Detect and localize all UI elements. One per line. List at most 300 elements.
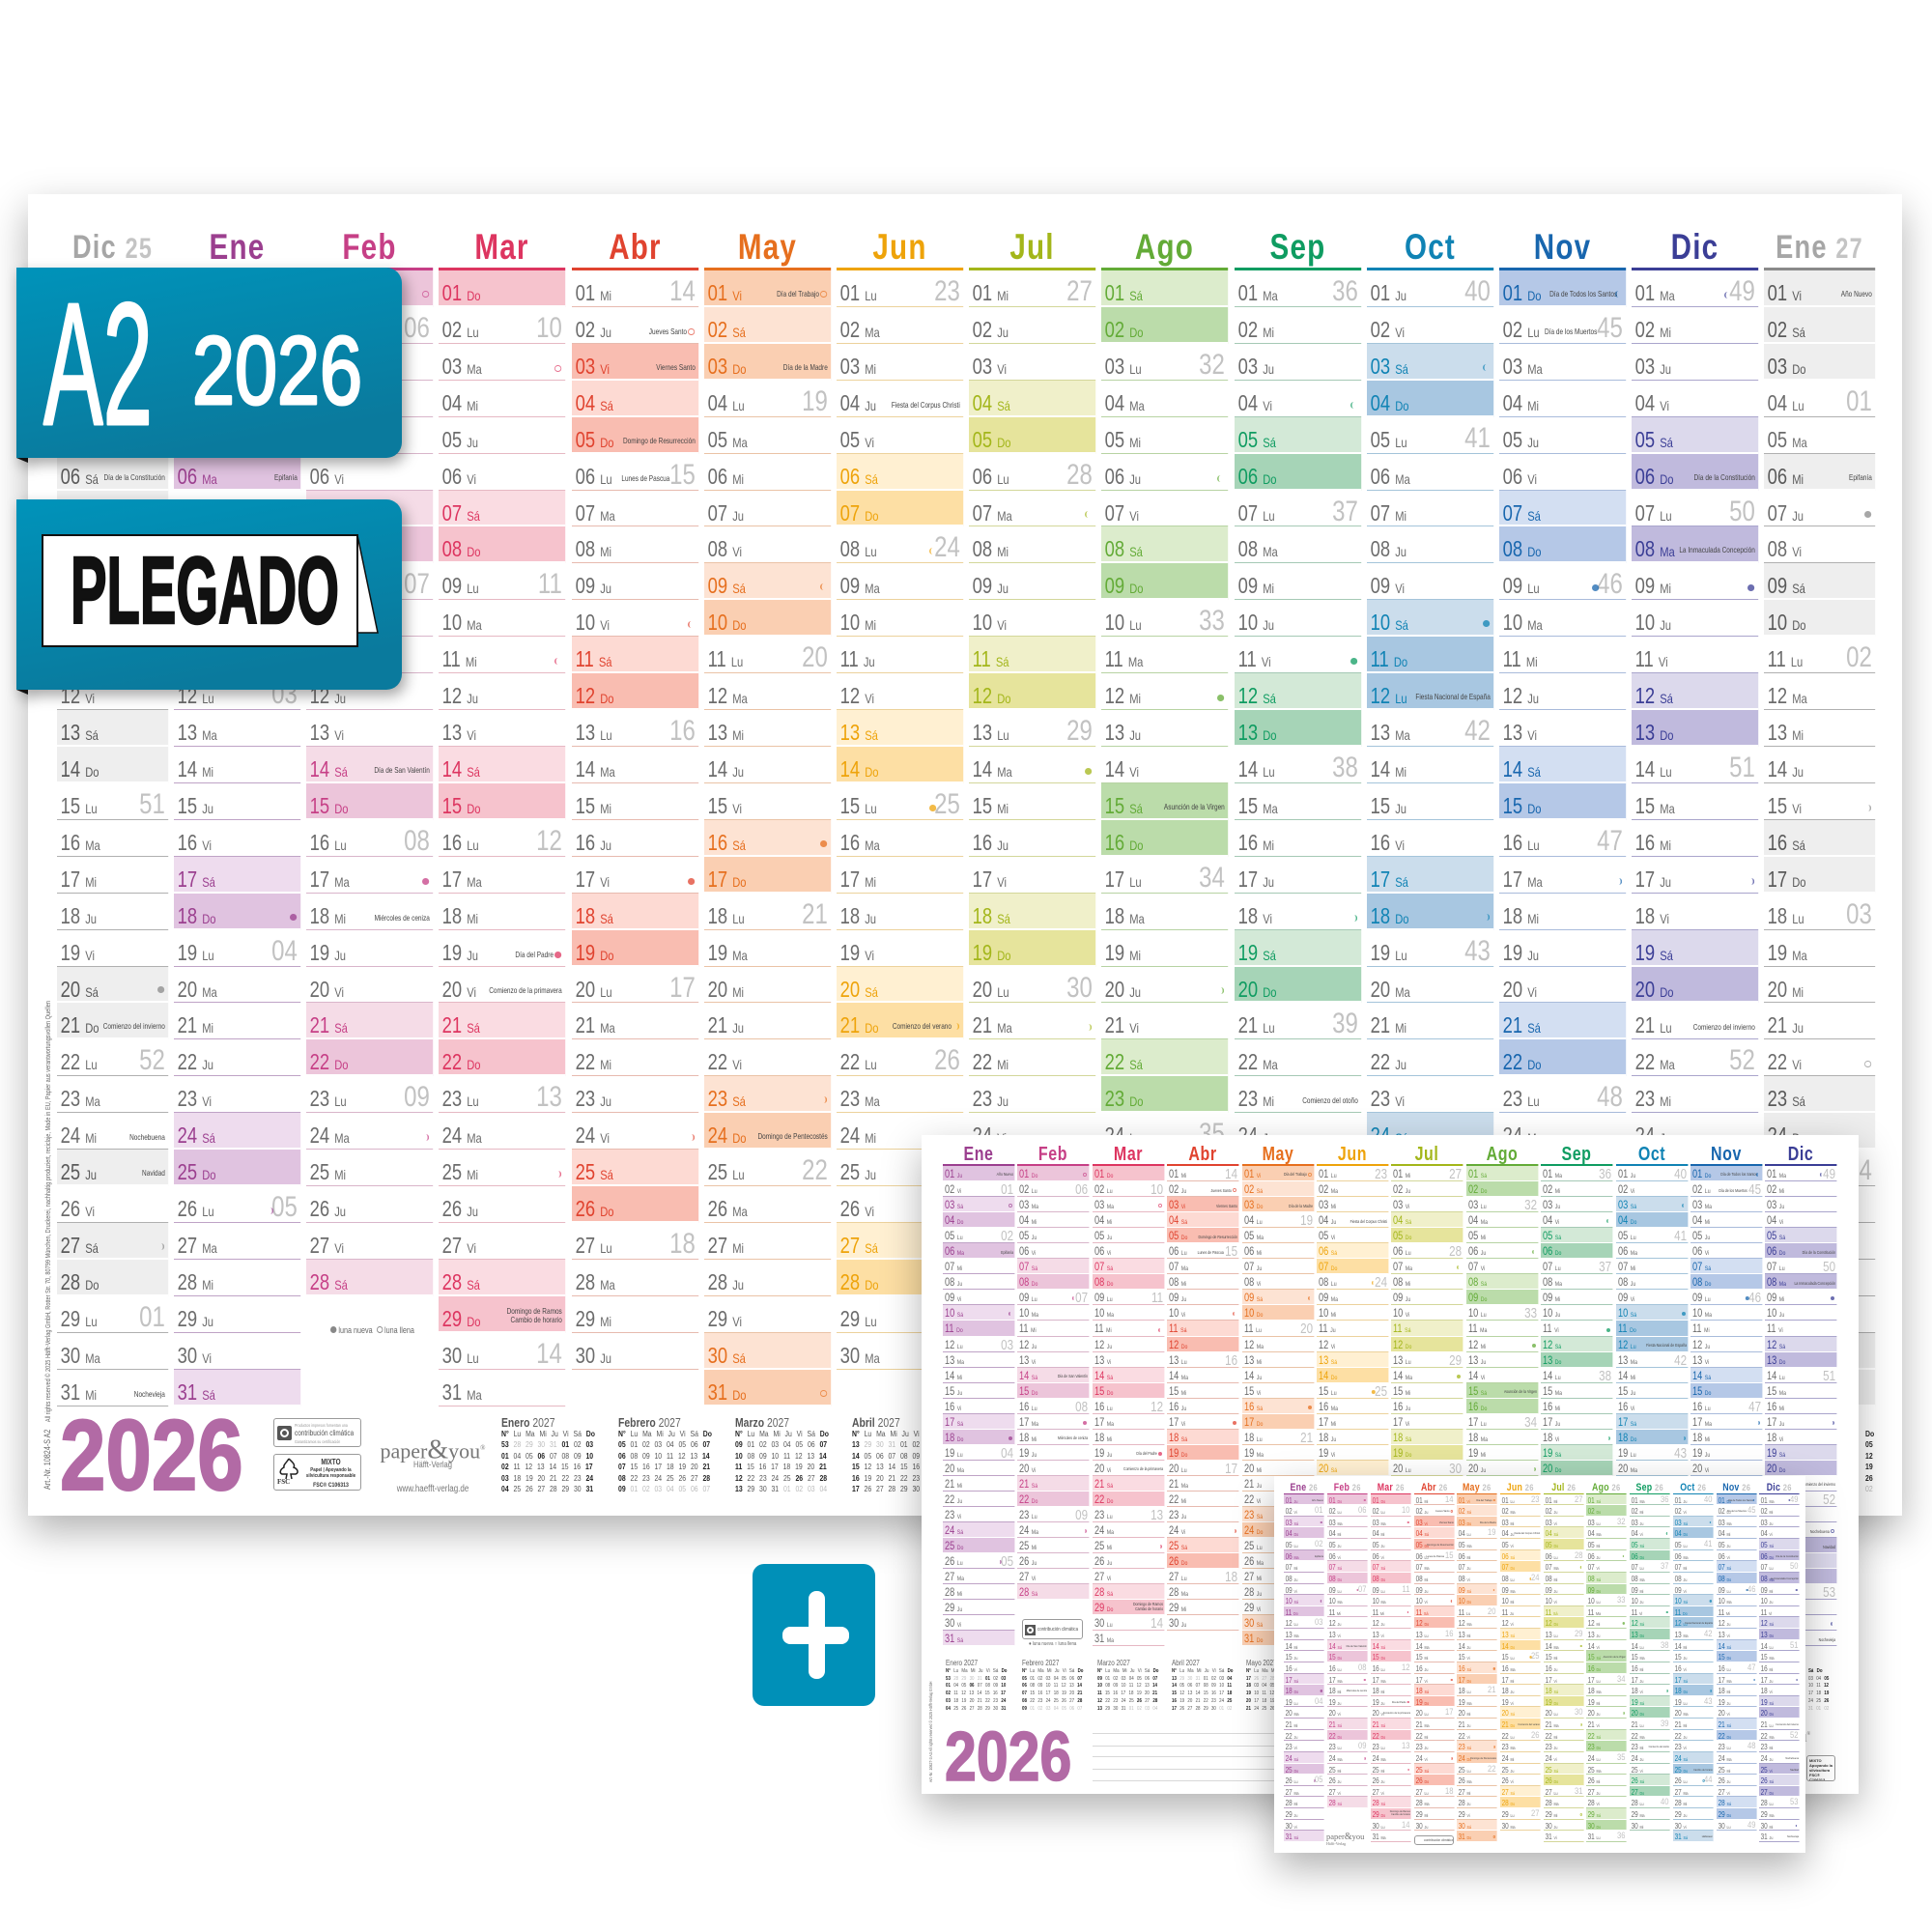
column: Jul 26 bbox=[1544, 1493, 1583, 1842]
column: Dic 26: 10 Ju bbox=[1761, 1597, 1774, 1605]
column: Mar 26: 12 Ju bbox=[1372, 1619, 1384, 1628]
column: Abr 26: 10 Vi bbox=[1415, 1597, 1427, 1605]
column: Feb 26: 16 Lu bbox=[1329, 1664, 1342, 1673]
column: Dic: 50 bbox=[1729, 496, 1755, 527]
column: Nov 26: 17 Ma bbox=[1718, 1675, 1731, 1685]
column: Nov 26: 09 Lu bbox=[1718, 1586, 1730, 1594]
column: Dic: 02 Mi bbox=[1767, 1184, 1785, 1196]
column: Jun: 14 Do bbox=[840, 756, 879, 781]
column: Nov: 14 Sá bbox=[1503, 756, 1541, 781]
column: Feb: 21 Sá bbox=[1019, 1479, 1038, 1491]
heading: Jun: Jun bbox=[1338, 1144, 1367, 1165]
column: May 26: Día del Trabajo bbox=[1477, 1498, 1492, 1502]
column: Jul 26: 11 Sá bbox=[1545, 1608, 1557, 1617]
logo: paper & you small: Häfft-Verlag bbox=[1326, 1841, 1346, 1846]
column: Jun: 17 Mi bbox=[840, 867, 876, 892]
logo: paper & you: www.haefft-verlag.de bbox=[397, 1484, 469, 1494]
column: Dic: 08 Ma bbox=[1635, 536, 1675, 561]
column: Mar: 17 Ma bbox=[442, 867, 482, 892]
heading: Ago: Ago bbox=[1135, 227, 1194, 267]
column: May: 21 bbox=[802, 898, 828, 930]
column: Ago 26: 31 Lu bbox=[1588, 1833, 1601, 1841]
column: Mar: 15 Do bbox=[442, 793, 481, 818]
column: Jun 26: 07 Do bbox=[1502, 1563, 1515, 1572]
column: Ene: 24 Sá bbox=[945, 1525, 963, 1537]
column: Abr: 04 Sá bbox=[575, 390, 612, 415]
column: Ene: 01 bbox=[271, 312, 298, 344]
column: Ago 26: 28 Vi bbox=[1588, 1799, 1600, 1807]
column: Feb 26: 13 Vi bbox=[1329, 1631, 1341, 1639]
column: Sep: 04 Vi bbox=[1543, 1215, 1560, 1227]
column: Nov: 23 Lu bbox=[1503, 1086, 1540, 1111]
column: Mar: 30 Lu bbox=[442, 1343, 479, 1368]
column: Abr: 22 Mi bbox=[575, 1049, 611, 1074]
mini calendar: Febrero 2027: N° Lu Ma Mi Ju Vi Sá Do 05 01 02 03 04 05 06 07 06 08 09 10 11 12 13 14 07 15 16 17 18 19 20 21 08 22 23 24 25 26 27 28 09 01 02 03 04 05 06 07 bbox=[1022, 1668, 1083, 1712]
column: May 26: Domingo de Pentecostés bbox=[1470, 1756, 1496, 1760]
column: May: 02 Sá bbox=[1244, 1184, 1263, 1196]
column: Nov: 02 Lu bbox=[1503, 317, 1540, 342]
column: Sep: 08 Ma bbox=[1237, 536, 1277, 561]
mini calendar: Mayo 2027: N° Lu Ma Mi Ju Vi Sá Do 17 26 27 28 29 30 01 02 18 03 04 05 06 07 08 09 19 10 11 12 13 14 15 16 20 17 18 19 20 21 22 23 21 24 25 26 27 28 29 30 bbox=[1246, 1668, 1307, 1712]
column: Jul: 28 bbox=[1066, 459, 1093, 491]
column: Sep bbox=[1541, 1164, 1612, 1476]
column: Dic 26: Nochebuena bbox=[1786, 1756, 1799, 1760]
column: Sep: 24 Ju bbox=[1237, 1122, 1274, 1148]
column: Feb: 13 Vi bbox=[310, 720, 344, 745]
column: Mar: 05 Ju bbox=[442, 427, 478, 452]
column: Ene 27: 03 Do bbox=[1768, 354, 1806, 379]
column: May: 04 Lu bbox=[707, 390, 744, 415]
column: May: 19 bbox=[1300, 1213, 1313, 1229]
column: Ago 26: 09 Do bbox=[1588, 1586, 1602, 1594]
column: Ene: 01 bbox=[1001, 1182, 1013, 1198]
column: Dic 26: 25 Vi bbox=[1761, 1766, 1773, 1774]
column: Ago: 10 Lu bbox=[1105, 610, 1142, 635]
column: Dic: 09 Mi bbox=[1767, 1293, 1785, 1304]
column: Mar 26: 13 bbox=[1402, 1741, 1409, 1751]
column: Jun: Fiesta del Corpus Christi bbox=[892, 401, 960, 410]
column: Feb 26: Miércoles de ceniza bbox=[1347, 1689, 1367, 1692]
column: Mar 26: 13 Vi bbox=[1372, 1631, 1384, 1639]
column: Jun 26: 29 Lu bbox=[1502, 1810, 1515, 1819]
column: Ago: Asunción de la Virgen bbox=[1504, 1389, 1537, 1394]
column: Mar 26: 10 Ma bbox=[1372, 1597, 1385, 1605]
column: Mar: 11 Mi bbox=[442, 646, 477, 671]
column: Oct: 15 Ju bbox=[1370, 793, 1406, 818]
column: Feb 26: 06 bbox=[1358, 1505, 1367, 1516]
column: Oct 26: 06 Ma bbox=[1674, 1552, 1688, 1561]
column: Nov: Día de los Muertos bbox=[1545, 327, 1597, 336]
column: Sep: 10 Ju bbox=[1543, 1308, 1560, 1320]
column: Sep: 39 bbox=[1332, 1008, 1357, 1039]
column: Sep 26: 36 bbox=[1661, 1493, 1669, 1505]
column: Nov: 45 bbox=[1597, 312, 1623, 344]
column: Dic: 03 Ju bbox=[1767, 1200, 1785, 1211]
column: Jun: 25 bbox=[934, 788, 960, 820]
column: Ene: 31 Sá bbox=[178, 1379, 215, 1405]
column: Feb: 25 Mi bbox=[1019, 1541, 1037, 1552]
column: May 26: 22 Vi bbox=[1459, 1732, 1470, 1741]
column: Ene 27: 27 Mi bbox=[1768, 1233, 1804, 1258]
column: Abr: 16 bbox=[669, 715, 695, 747]
column: Ene: 25 Do bbox=[178, 1159, 216, 1184]
column: Feb: Miércoles de ceniza bbox=[375, 914, 430, 923]
column: Ene 27: 20 Mi bbox=[1768, 977, 1804, 1002]
column: Ene: 08 Ju bbox=[945, 1277, 962, 1289]
column: Mar: Domingo de Ramos bbox=[507, 1307, 562, 1316]
column: Jun: 10 Mi bbox=[840, 610, 876, 635]
column: Ago: 06 Ju bbox=[1468, 1246, 1486, 1258]
column: Dic: Nochebuena bbox=[1810, 1529, 1830, 1534]
column: Dic 25: 02 Ma bbox=[61, 317, 100, 342]
heading: Abr: Abr bbox=[609, 227, 661, 267]
column: Jul: 23 Ju bbox=[973, 1086, 1009, 1111]
column: Nov: 03 Ma bbox=[1503, 354, 1543, 379]
column: Abr 26: 16 Ju bbox=[1415, 1664, 1428, 1673]
column: Oct: 20 Ma bbox=[1370, 977, 1410, 1002]
heading: Ago: Ago bbox=[1486, 1144, 1518, 1165]
column: Abr 26: Domingo de Resurrección bbox=[1427, 1543, 1453, 1547]
column: Ago 26: 17 Lu bbox=[1588, 1675, 1601, 1685]
column: Dic: 11 Vi bbox=[1635, 646, 1668, 671]
column: Feb 26: 25 Mi bbox=[1329, 1766, 1341, 1774]
mini calendar: Enero 2027: Enero 2027 bbox=[501, 1415, 555, 1430]
column: Mar: 21 Sá bbox=[1094, 1479, 1113, 1491]
column: Ene 27: 26 Ma bbox=[1768, 1196, 1807, 1221]
column: Jul 26: 29 bbox=[1575, 1629, 1582, 1639]
column: Mar 26: 27 Vi bbox=[1372, 1788, 1384, 1797]
column: Mar 26 bbox=[1371, 1493, 1410, 1842]
column: Feb 26: 14 Sá bbox=[1329, 1642, 1342, 1651]
column: Oct: 07 Mi bbox=[1618, 1262, 1635, 1273]
heading: Feb: Feb bbox=[343, 227, 397, 267]
column: Abr: 03 Vi bbox=[575, 354, 610, 379]
column: Jun: 10 Mi bbox=[1319, 1308, 1336, 1320]
column: Oct: 23 Vi bbox=[1370, 1086, 1405, 1111]
column: Dic: 21 Lu bbox=[1635, 1012, 1672, 1037]
column: Jul 26: 05 Do bbox=[1545, 1541, 1558, 1549]
column: Nov 26: 08 Do bbox=[1718, 1575, 1731, 1583]
column: Sep: 08 Ma bbox=[1543, 1277, 1562, 1289]
column: Ago: 07 Vi bbox=[1105, 500, 1139, 526]
column: Ene 26: 19 Lu bbox=[1286, 1698, 1298, 1707]
icon: plus button bbox=[753, 1564, 875, 1706]
column: Jun 26: 19 Vi bbox=[1502, 1698, 1514, 1707]
badge: contribución climática: contribución climática bbox=[295, 1429, 354, 1437]
column: Sep: 10 Ju bbox=[1237, 610, 1274, 635]
column: Oct 26: 24 Sá bbox=[1674, 1754, 1688, 1763]
column: Jul: 27 bbox=[1450, 1167, 1462, 1182]
column: May: 13 Mi bbox=[1244, 1355, 1262, 1367]
column: Feb 26: 24 Ma bbox=[1329, 1754, 1343, 1763]
column: May: 15 Vi bbox=[1244, 1386, 1261, 1398]
column: Abr: 18 Sá bbox=[575, 903, 612, 928]
column: Sep 26: 25 Vi bbox=[1632, 1766, 1643, 1774]
mini calendar: Marzo 2027: Marzo 2027 bbox=[735, 1415, 789, 1430]
column: May: 21 Ju bbox=[707, 1012, 744, 1037]
column: Jul: 21 Ma bbox=[973, 1012, 1012, 1037]
column: May: 11 Lu bbox=[1244, 1323, 1261, 1335]
column: Oct: 13 Ma bbox=[1370, 720, 1410, 745]
column: Oct 26: 42 bbox=[1704, 1629, 1712, 1639]
column: May: 22 Vi bbox=[707, 1049, 742, 1074]
column: May: 20 bbox=[802, 641, 828, 673]
column: Ago: 34 bbox=[1524, 1415, 1537, 1431]
column: Jun: 27 bbox=[934, 1301, 960, 1333]
column: Oct 26: 11 Do bbox=[1674, 1608, 1688, 1617]
mini calendar: Abril 2027: Abril 2027 bbox=[1172, 1659, 1200, 1667]
column: Mar: Cambio de horario bbox=[1135, 1606, 1163, 1611]
column: Dic 26: 15 Ma bbox=[1761, 1653, 1775, 1662]
column: May: 28 Ju bbox=[1244, 1587, 1262, 1599]
column: Feb: 18 Mi bbox=[310, 903, 346, 928]
column: Jun: 11 Ju bbox=[1319, 1323, 1336, 1335]
column: Sep: 22 Ma bbox=[1237, 1049, 1277, 1074]
column: Abr: 16 Ju bbox=[575, 830, 611, 855]
column: Nov 26: 49 bbox=[1747, 1820, 1755, 1831]
column: Ene 26: 01 bbox=[1315, 1505, 1323, 1516]
column: Dic: 21 Lu bbox=[1767, 1479, 1785, 1491]
column: Ene 26: 04 Do bbox=[1286, 1529, 1299, 1538]
column: Ago: 18 Ma bbox=[1468, 1433, 1488, 1444]
column: Feb 26: 15 Do bbox=[1329, 1653, 1342, 1662]
column: Nov 26: 22 Do bbox=[1718, 1732, 1731, 1741]
column: May: 18 Lu bbox=[1244, 1433, 1262, 1444]
column: May: 10 Do bbox=[1244, 1308, 1263, 1320]
column: Dic: 28 Lu bbox=[1767, 1587, 1785, 1599]
column: Feb: 16 Lu bbox=[310, 830, 347, 855]
column: May: 07 Ju bbox=[1244, 1262, 1262, 1273]
column: May 26: 18 Lu bbox=[1459, 1687, 1471, 1695]
column: Abr: 30 Ju bbox=[1169, 1618, 1186, 1630]
column: Dic 26: Navidad bbox=[1790, 1768, 1799, 1772]
column: Jun 26: 14 Do bbox=[1502, 1642, 1515, 1651]
column: Mar: 11 bbox=[538, 568, 562, 600]
column: Mar: 04 Mi bbox=[442, 390, 478, 415]
column: Mar: 19 Ju bbox=[442, 940, 478, 965]
column: Ago 26 bbox=[1586, 1493, 1627, 1842]
column: Jul: 19 Do bbox=[973, 940, 1011, 965]
column: May: 13 Mi bbox=[707, 720, 744, 745]
column: Sep: 20 Do bbox=[1543, 1463, 1562, 1475]
column: May 26: 23 Sá bbox=[1459, 1743, 1471, 1751]
column: Dic 26: 13 Do bbox=[1761, 1631, 1775, 1639]
column: Feb 26: Día de San Valentín bbox=[1347, 1644, 1367, 1648]
column: Oct 26: 03 Sá bbox=[1674, 1519, 1688, 1527]
column: Ene: 06 Ma bbox=[178, 464, 217, 489]
column: Ene 26: 25 Do bbox=[1286, 1766, 1299, 1774]
column: Jun: 03 Mi bbox=[840, 354, 876, 379]
column: Feb 26: 07 Sá bbox=[1329, 1563, 1342, 1572]
column: Abr: 18 bbox=[1225, 1570, 1237, 1585]
column: Abr 26: 05 Do bbox=[1415, 1541, 1429, 1549]
column: Jun 26: 01 Lu bbox=[1502, 1495, 1515, 1505]
column: Ago: 14 Vi bbox=[1105, 756, 1139, 781]
column: Ene 26: 03 bbox=[1315, 1617, 1323, 1628]
column: Jul: 14 Ma bbox=[973, 756, 1012, 781]
column: Mar: Comienzo de la primavera bbox=[490, 986, 562, 995]
column: Feb: 06 Vi bbox=[1019, 1246, 1037, 1258]
year 2026: 2026 bbox=[945, 1719, 1071, 1796]
column: Mar: 26 Ju bbox=[442, 1196, 478, 1221]
column: Abr 26: 09 Ju bbox=[1415, 1586, 1428, 1594]
column: Jul: 28 bbox=[1450, 1244, 1462, 1260]
column: Mar: 01 Do bbox=[442, 280, 481, 305]
column: May 26: 16 Sá bbox=[1459, 1664, 1471, 1673]
column: Nov: 06 Vi bbox=[1503, 464, 1537, 489]
column: May 26: 12 Ma bbox=[1459, 1619, 1472, 1628]
column: Ene 27: 08 Vi bbox=[1768, 536, 1802, 561]
column: Mar: 24 Ma bbox=[1094, 1525, 1114, 1537]
column: Ene 27: 14 Ju bbox=[1768, 756, 1804, 781]
column: Mar: 20 Vi bbox=[1094, 1463, 1111, 1475]
column: Dic 25: 31 Mi bbox=[61, 1379, 97, 1405]
heading: Jul: Jul bbox=[1010, 227, 1055, 267]
mini calendar: Febrero 2027: Febrero 2027 bbox=[618, 1415, 681, 1430]
column: Ene 26: 06 Ma bbox=[1286, 1552, 1299, 1561]
column: Dic 26: 14 Lu bbox=[1761, 1642, 1774, 1651]
column: Dic 25: 11 Ju bbox=[61, 646, 96, 671]
column: Ene 26: 20 Ma bbox=[1286, 1709, 1299, 1718]
column: Dic: 02 Mi bbox=[1635, 317, 1671, 342]
column: Mar: 30 Lu bbox=[1094, 1618, 1112, 1630]
column: Sep: 36 bbox=[1332, 275, 1357, 307]
column: Abr: 14 Ma bbox=[575, 756, 614, 781]
column: Abr: 13 Lu bbox=[1169, 1355, 1187, 1367]
column: May: 20 Mi bbox=[1244, 1463, 1262, 1475]
column: Abr: 14 Ma bbox=[1169, 1371, 1188, 1382]
column: Ene: Epifanía bbox=[274, 473, 298, 482]
column: Nov 26: 24 Ma bbox=[1718, 1754, 1731, 1763]
column: Abr: 18 Sá bbox=[1169, 1433, 1187, 1444]
heading: Ene 26: Ene 26 bbox=[1291, 1482, 1318, 1493]
column: Dic: 20 Do bbox=[1635, 977, 1674, 1002]
column: Sep: 16 Mi bbox=[1543, 1402, 1560, 1413]
column: Mar 26: 12 bbox=[1402, 1662, 1409, 1673]
column: Mar: 08 Do bbox=[1094, 1277, 1113, 1289]
column: Sep: 05 Sá bbox=[1237, 427, 1275, 452]
column: Jul 26: 17 Vi bbox=[1545, 1675, 1556, 1685]
column: Nov: 17 Ma bbox=[1692, 1417, 1712, 1429]
column: Sep: 13 Do bbox=[1237, 720, 1276, 745]
column: May 26: 21 bbox=[1488, 1685, 1496, 1695]
column: May 26: 29 Vi bbox=[1459, 1810, 1470, 1819]
column: Nov: Día de Todos los Santos bbox=[1549, 290, 1617, 298]
column: Oct: 01 Ju bbox=[1618, 1169, 1635, 1180]
mini calendar: Marzo 2027: N° Lu Ma Mi Ju Vi Sá Do 09 01 02 03 04 05 06 07 10 08 09 10 11 12 13 14 11 15 16 17 18 19 20 21 12 22 23 24 25 26 27 28 13 29 30 31 01 02 03 04 bbox=[1097, 1668, 1158, 1712]
column: Ene: 09 Vi bbox=[178, 573, 212, 598]
column: Ago 26: 10 Lu bbox=[1588, 1597, 1601, 1605]
column: Mar 26: 09 Lu bbox=[1372, 1586, 1384, 1594]
column: May: 17 Do bbox=[707, 867, 746, 892]
column: Jul: 13 Lu bbox=[1393, 1355, 1411, 1367]
column: Feb: 09 Lu bbox=[310, 573, 347, 598]
column: Mar: 18 Mi bbox=[1094, 1433, 1112, 1444]
column: Ene: 20 Ma bbox=[945, 1463, 964, 1475]
column: May: 16 Sá bbox=[707, 830, 746, 855]
column: Feb: 11 Mi bbox=[1019, 1323, 1037, 1335]
column: Feb: 12 Ju bbox=[310, 683, 346, 708]
column: Oct: 16 Vi bbox=[1618, 1402, 1634, 1413]
column: Oct 26: 15 Ju bbox=[1674, 1653, 1687, 1662]
heading: Feb: Feb bbox=[1038, 1144, 1067, 1165]
column: Sep: 37 bbox=[1332, 496, 1357, 527]
column: Jun: 30 Ma bbox=[840, 1343, 880, 1368]
column: Mar: 01 Do bbox=[1094, 1169, 1113, 1180]
column: Mar: Día del Padre bbox=[516, 951, 554, 959]
column: Sep 26: Comienzo del otoño bbox=[1649, 1745, 1669, 1748]
column: Mar: 13 Vi bbox=[1094, 1355, 1111, 1367]
column: Sep 26: 40 bbox=[1661, 1797, 1669, 1807]
column: Jul: 22 Mi bbox=[973, 1049, 1009, 1074]
column: Jul: 12 Do bbox=[973, 683, 1011, 708]
column: Ene 26: 18 Do bbox=[1286, 1687, 1299, 1695]
column: Feb: 07 bbox=[1076, 1291, 1088, 1306]
column: Ago: 04 Ma bbox=[1105, 390, 1145, 415]
column: Jun: 08 Lu bbox=[840, 536, 877, 561]
column: Abr: 17 Vi bbox=[1169, 1417, 1186, 1429]
column: Nov 26: 30 Lu bbox=[1718, 1822, 1730, 1831]
column: Abr: 16 Ju bbox=[1169, 1402, 1186, 1413]
column: Mar: 27 Vi bbox=[1094, 1572, 1111, 1583]
column: May 26: 14 Ju bbox=[1459, 1642, 1471, 1651]
column: Sep: 07 Lu bbox=[1237, 500, 1274, 526]
column: Dic 26: 07 Lu bbox=[1761, 1563, 1774, 1572]
column: Oct 26: 07 Mi bbox=[1674, 1563, 1687, 1572]
column: Abr: 21 Ma bbox=[1169, 1479, 1188, 1491]
column: Dic 25: 21 Do bbox=[61, 1012, 99, 1037]
column: May: 29 Vi bbox=[1244, 1603, 1261, 1614]
column: Sep: 02 Mi bbox=[1543, 1184, 1560, 1196]
column: Feb 26: 21 Sá bbox=[1329, 1720, 1342, 1729]
column: Jun bbox=[1317, 1164, 1388, 1476]
column: Nov: 17 Ma bbox=[1503, 867, 1543, 892]
column: Oct: 07 Mi bbox=[1370, 500, 1406, 526]
column: Ago: 08 Sá bbox=[1105, 536, 1143, 561]
column: Jul 26: 31 Vi bbox=[1545, 1833, 1556, 1841]
column: Abr: 27 Lu bbox=[575, 1233, 611, 1258]
column: Mar: 25 Mi bbox=[1094, 1541, 1112, 1552]
column: Abr: 20 Lu bbox=[575, 977, 611, 1002]
column: Dic 25: 30 Ma bbox=[61, 1343, 100, 1368]
column: Jun: 07 Do bbox=[1319, 1262, 1337, 1273]
column: Feb: 19 Ju bbox=[1019, 1448, 1037, 1460]
column: Abr 26: 24 Vi bbox=[1415, 1754, 1427, 1763]
column: Ago: 06 Ju bbox=[1105, 464, 1141, 489]
column: Ene: 16 Vi bbox=[178, 830, 212, 855]
column: Ago: Asunción de la Virgen bbox=[1164, 803, 1225, 811]
column: Nov: 10 Ma bbox=[1692, 1308, 1712, 1320]
column: Mar: 06 Vi bbox=[1094, 1246, 1111, 1258]
column: Sep: 03 Ju bbox=[1543, 1200, 1560, 1211]
column: Dic: 52 bbox=[1729, 1044, 1755, 1076]
column: Mar bbox=[1093, 1164, 1164, 1646]
column: Oct 26: 25 Do bbox=[1674, 1766, 1688, 1774]
column: Jul 26: 28 Ma bbox=[1545, 1799, 1558, 1807]
column: Ene: 02 bbox=[1001, 1229, 1013, 1244]
column: Dic 26 bbox=[1759, 1493, 1800, 1842]
column: Jun: 08 Lu bbox=[1319, 1277, 1337, 1289]
column: Sep 26: 16 Mi bbox=[1632, 1664, 1644, 1673]
column: Dic: 49 bbox=[1729, 275, 1755, 307]
column: May 26: 04 Lu bbox=[1459, 1529, 1471, 1538]
column: Mar: 12 bbox=[536, 825, 562, 857]
column: Mar: 31 Ma bbox=[1094, 1634, 1114, 1645]
heading: Jun: Jun bbox=[872, 227, 927, 267]
column: Jul: 02 Ju bbox=[973, 317, 1009, 342]
column: Jul: 03 Vi bbox=[1393, 1200, 1410, 1211]
column: Oct: 10 Sá bbox=[1618, 1308, 1636, 1320]
